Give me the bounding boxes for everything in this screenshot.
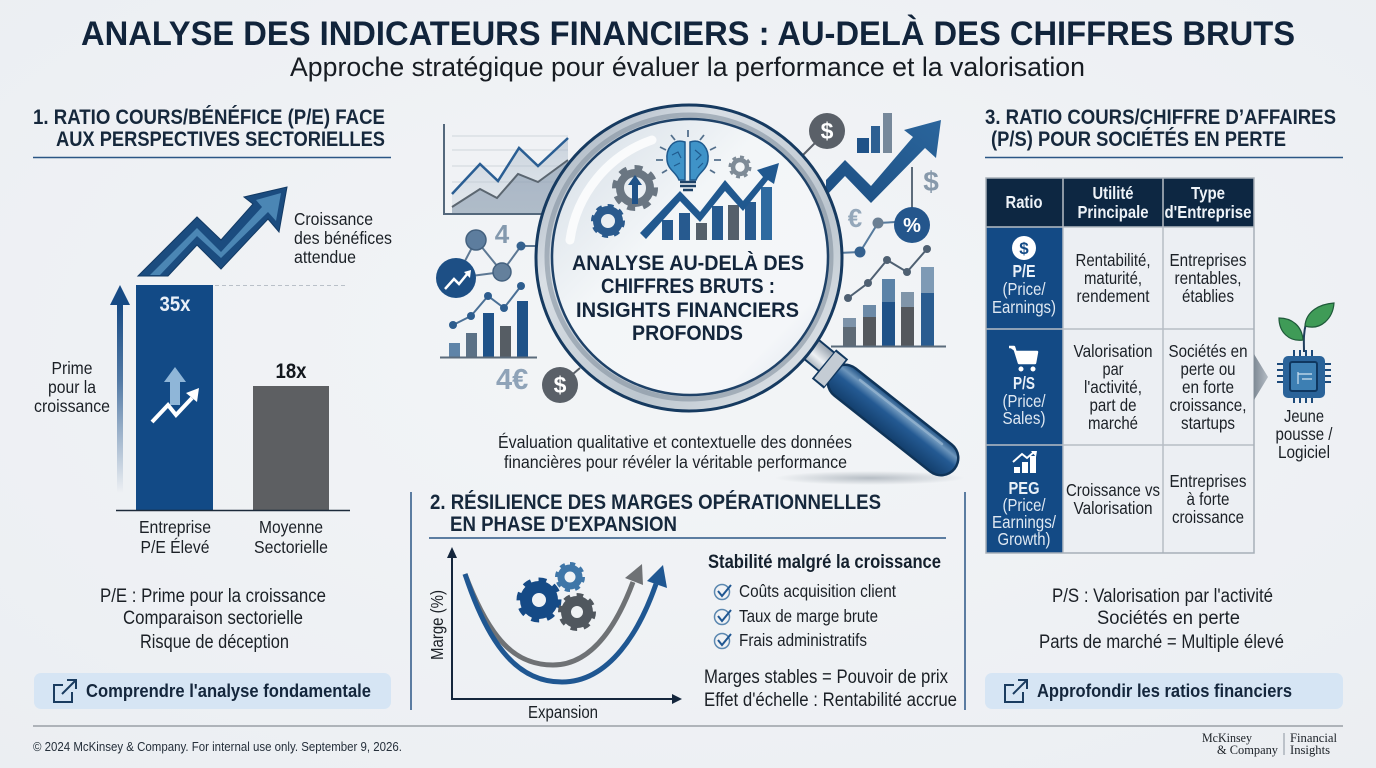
footer bbox=[33, 726, 1343, 757]
table row: P/S: Valorisation bbox=[1074, 341, 1152, 361]
icon: dollar coin top right bbox=[800, 113, 845, 158]
heading: section 2: EN PHASE D'EXPANSION bbox=[450, 513, 677, 536]
panel: P/S ratio bbox=[985, 106, 1343, 709]
table row: P/S: en forte bbox=[1182, 377, 1234, 397]
table header: Ratio bbox=[1006, 192, 1042, 212]
table row: P/E: établies bbox=[1182, 286, 1234, 306]
chart: margin curves bbox=[427, 547, 682, 722]
icon: euro amount: 4€ bbox=[496, 364, 528, 396]
icon: growth arrow bbox=[138, 187, 287, 276]
table row: P/E bbox=[992, 236, 1247, 317]
table row: P/S: (Price/ bbox=[1002, 391, 1046, 411]
table header: d'Entreprise bbox=[1164, 202, 1252, 222]
table row: P/E: Entreprises bbox=[1170, 250, 1247, 270]
table row: P/E: rentables, bbox=[1174, 268, 1242, 288]
table row: P/E: Rentabilité, bbox=[1076, 250, 1150, 270]
chart: margin curves: Expansion bbox=[528, 702, 598, 722]
bar chart: P/E comparison: Moyenne bbox=[259, 517, 323, 537]
bar chart: P/E comparison: P/E Élevé bbox=[140, 537, 210, 557]
check item: customer acquisition: Coûts acquisition client bbox=[739, 581, 896, 601]
bar chart: P/E comparison: 18x bbox=[276, 360, 307, 383]
table row: P/E: $ bbox=[1019, 239, 1029, 258]
heading: section 2: 2. RÉSILIENCE DES MARGES OPÉRATIONNELLES bbox=[430, 491, 881, 514]
label: startup: Logiciel bbox=[1278, 442, 1330, 462]
table row: P/E: rendement bbox=[1076, 286, 1150, 306]
bar chart: P/E comparison: 35x bbox=[160, 293, 191, 316]
table row: PEG bbox=[992, 451, 1247, 549]
label: earnings growth bbox=[294, 209, 392, 267]
table row: P/S: Sociétés en bbox=[1168, 341, 1248, 361]
icon: percent coin and line: % bbox=[903, 215, 921, 237]
text block: P/E takeaways: Comparaison sectorielle bbox=[123, 608, 303, 629]
heading: section 3: 3. RATIO COURS/CHIFFRE D’AFFAIRES bbox=[985, 106, 1336, 129]
logo: McKinsey bbox=[1202, 730, 1252, 745]
heading: lens text: INSIGHTS FINANCIERS bbox=[576, 299, 799, 322]
logo: & Company bbox=[1217, 742, 1278, 757]
callout: financial ratios link: Approfondir les ratios financiers bbox=[1037, 680, 1292, 701]
table row: P/E: (Price/ bbox=[1002, 279, 1046, 299]
check item: gross margin: Taux de marge brute bbox=[739, 606, 878, 626]
label: earnings growth: des bénéfices bbox=[294, 228, 392, 248]
bar chart: P/E comparison: Entreprise bbox=[139, 517, 211, 537]
heading: lens text: PROFONDS bbox=[632, 322, 743, 345]
text block: P/S takeaways bbox=[1039, 586, 1284, 653]
table row: P/S: l'activité, bbox=[1084, 377, 1142, 397]
table: ratios bbox=[986, 178, 1254, 553]
chart: area chart bbox=[444, 124, 568, 214]
icon: dollar coin left bbox=[542, 367, 580, 403]
table row: PEG: PEG bbox=[1008, 478, 1040, 498]
text block: P/E takeaways: Risque de déception bbox=[140, 632, 289, 653]
label: growth premium bbox=[34, 358, 110, 416]
icon: dollar coin top right: $ bbox=[821, 118, 834, 144]
heading: section 1: AUX PERSPECTIVES SECTORIELLES bbox=[56, 128, 385, 151]
table row: P/S: perte ou bbox=[1180, 359, 1236, 379]
chart: stacked bars right bbox=[831, 245, 946, 346]
heading: lens text: CHIFFRES BRUTS : bbox=[601, 275, 775, 298]
copyright: © 2024 McKinsey & Company. For internal use only. September 9, 2026. bbox=[33, 740, 402, 754]
title: ANALYSE DES INDICATEURS FINANCIERS : AU-DELÀ DES CHIFFRES BRUTS bbox=[81, 15, 1295, 53]
table row: PEG: Growth) bbox=[998, 529, 1050, 549]
icon: growth in bar bbox=[152, 367, 199, 422]
table row: P/E: Earnings) bbox=[992, 297, 1056, 317]
icon: dollar sign: $ bbox=[923, 166, 939, 197]
label: startup bbox=[1276, 406, 1333, 462]
icon: magnifying glass bbox=[536, 105, 965, 485]
label: earnings growth: attendue bbox=[294, 247, 356, 267]
text block: central description: Évaluation qualitative et contextuelle des données bbox=[498, 432, 852, 452]
table row: PEG: croissance bbox=[1172, 507, 1244, 527]
subtitle: Approche stratégique pour évaluer la performance et la valorisation bbox=[290, 52, 1085, 82]
logo: Financial bbox=[1290, 730, 1337, 745]
table row: P/S bbox=[1002, 341, 1248, 433]
icon: gears bbox=[520, 564, 593, 628]
bar chart: P/E comparison bbox=[116, 285, 350, 557]
icon: gears in lens bbox=[594, 158, 750, 236]
text block: margin takeaways: Marges stables = Pouvoir de prix bbox=[704, 667, 948, 688]
table header: Principale bbox=[1078, 202, 1149, 222]
text block: P/S takeaways: Sociétés en perte bbox=[1097, 608, 1240, 629]
table row: PEG: Entreprises bbox=[1170, 471, 1247, 491]
panel: central illustration bbox=[436, 105, 965, 485]
table row: PEG: Earnings/ bbox=[992, 512, 1056, 532]
chart: small bars top right bbox=[857, 113, 892, 153]
heading: section 2 bbox=[429, 491, 946, 538]
logo bbox=[1202, 730, 1337, 757]
logo: Insights bbox=[1290, 742, 1330, 757]
table row: P/S: Sales) bbox=[1002, 408, 1046, 428]
heading: section 3: (P/S) POUR SOCIÉTÉS EN PERTE bbox=[991, 128, 1286, 151]
panel: margin resilience bbox=[411, 491, 965, 722]
text block: P/S takeaways: P/S : Valorisation par l'activité bbox=[1052, 586, 1273, 607]
table row: PEG: à forte bbox=[1186, 489, 1230, 509]
icon: sprouting chip bbox=[1277, 303, 1334, 403]
table row: PEG: (Price/ bbox=[1002, 495, 1046, 515]
table row: P/S: startups bbox=[1181, 413, 1235, 433]
table row: P/S: part de bbox=[1090, 395, 1136, 415]
chart: network icons: 4 bbox=[495, 219, 510, 249]
label: growth premium: croissance bbox=[34, 396, 110, 416]
table row: P/S: P/S bbox=[1013, 373, 1035, 393]
icon: percent coin and line bbox=[838, 167, 930, 258]
label: earnings growth: Croissance bbox=[294, 209, 373, 229]
callout: financial ratios link bbox=[985, 673, 1343, 709]
arrow: rising trend right bbox=[826, 120, 941, 203]
icon: brain light bulb bbox=[656, 130, 721, 190]
table header: Utilité bbox=[1092, 183, 1134, 203]
table row: P/S: marché bbox=[1088, 413, 1138, 433]
label: startup: pousse / bbox=[1276, 424, 1333, 444]
heading: section 1: 1. RATIO COURS/BÉNÉFICE (P/E) FACE bbox=[33, 106, 385, 129]
heading: lens text: ANALYSE AU-DELÀ DES bbox=[572, 252, 804, 275]
chart: margin curves: Marge (%) bbox=[427, 590, 447, 660]
arrow: table to startup bbox=[1254, 354, 1268, 400]
heading: section 1 bbox=[33, 106, 391, 158]
table row: PEG: Croissance vs bbox=[1066, 480, 1160, 500]
check item: admin costs: Frais administratifs bbox=[739, 630, 867, 650]
label: growth premium: pour la bbox=[48, 377, 96, 397]
table row: P/E: P/E bbox=[1012, 261, 1036, 281]
heading: section 3 bbox=[985, 106, 1343, 158]
table row: PEG: Valorisation bbox=[1074, 498, 1152, 518]
panel: ratio P/E bbox=[33, 106, 392, 709]
text block: central description: financières pour révéler la véritable performance bbox=[504, 452, 847, 472]
label: growth premium: Prime bbox=[52, 358, 92, 378]
text block: margin takeaways bbox=[704, 667, 957, 711]
icon: euro sign: € bbox=[848, 203, 862, 233]
text block: P/S takeaways: Parts de marché = Multiple élevé bbox=[1039, 632, 1284, 653]
callout: fundamental analysis link: Comprendre l'analyse fondamentale bbox=[86, 680, 371, 701]
text block: margin takeaways: Effet d'échelle : Rentabilité accrue bbox=[704, 690, 957, 711]
arrow: premium axis bbox=[110, 285, 130, 493]
text block: central description bbox=[498, 432, 852, 472]
chart: network icons bbox=[436, 219, 540, 298]
text block: stability checklist: Stabilité malgré la croissance bbox=[708, 552, 941, 573]
text block: P/E takeaways bbox=[100, 586, 326, 653]
icon: dollar coin left: $ bbox=[554, 372, 567, 398]
table header: Type bbox=[1191, 183, 1225, 203]
label: startup: Jeune bbox=[1284, 406, 1324, 426]
table row: P/E: maturité, bbox=[1084, 268, 1142, 288]
table row: P/S: croissance, bbox=[1170, 395, 1246, 415]
chart: bars and arrow in lens bbox=[640, 163, 779, 240]
callout: fundamental analysis link bbox=[34, 673, 391, 709]
heading: lens text bbox=[572, 252, 804, 345]
bar chart: P/E comparison: Sectorielle bbox=[254, 537, 328, 557]
table row: P/S: par bbox=[1102, 359, 1124, 379]
table header bbox=[1006, 183, 1252, 222]
chart: left bars bbox=[440, 282, 537, 358]
text block: stability checklist bbox=[708, 552, 941, 650]
text block: P/E takeaways: P/E : Prime pour la croissance bbox=[100, 586, 326, 607]
